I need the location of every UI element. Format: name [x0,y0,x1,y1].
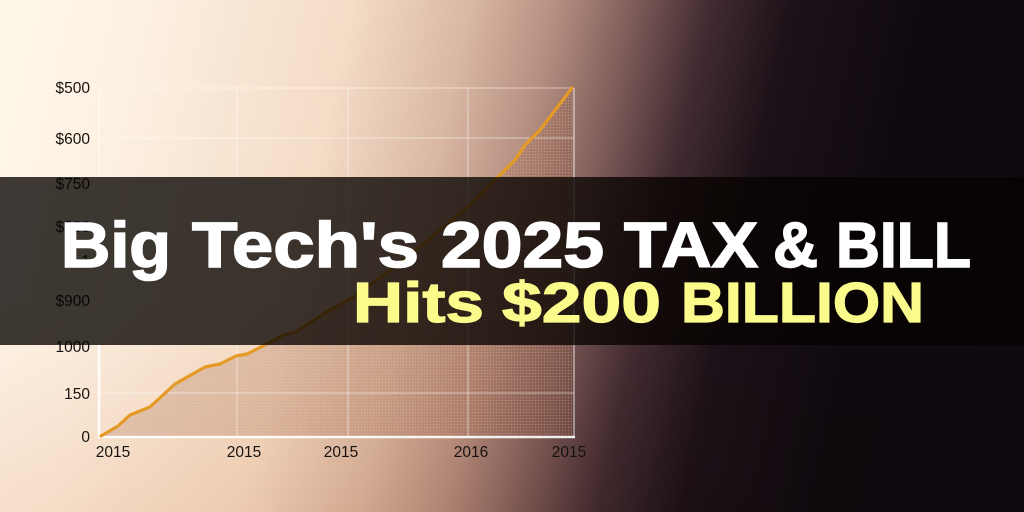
y-axis labels: 0 [81,429,90,446]
y-axis labels: $800 [56,219,90,236]
x-axis labels: 2015 [552,444,586,461]
y-axis labels: 1 [81,253,90,270]
y-axis labels: 150 [64,386,90,403]
title line 1: Big [61,209,171,281]
y-axis labels: $500 [56,80,90,97]
dark title band [0,177,1024,345]
x-axis labels: 2015 [324,444,358,461]
title line 1 [61,209,971,281]
title line 1: 2025 [441,209,604,281]
y-axis labels: $900 [56,293,90,310]
title line 2: Hits [353,271,484,335]
line chart [56,80,586,461]
title line 2 [353,271,924,335]
y-axis labels: $600 [56,131,90,148]
title line 1: TAX [624,209,758,281]
title line 2: $200 [502,271,661,335]
x-axis labels: 2015 [96,444,130,461]
title line 1: Tech's [192,209,419,281]
y-axis labels [56,80,90,446]
chart grid lines [95,88,574,436]
x-axis labels [96,444,586,461]
x-axis labels: 2016 [454,444,488,461]
x-axis labels: 2015 [227,444,261,461]
lower background shading [0,300,1024,512]
title line 1: & [773,209,818,281]
y-axis labels: $750 [56,176,90,193]
title line 1: BILL [836,209,971,281]
y-axis labels: 1000 [56,339,90,356]
chart axes [99,88,575,438]
title line 2: BILLION [681,271,924,335]
chart area fill [101,88,572,436]
revenue trend line [101,88,572,436]
